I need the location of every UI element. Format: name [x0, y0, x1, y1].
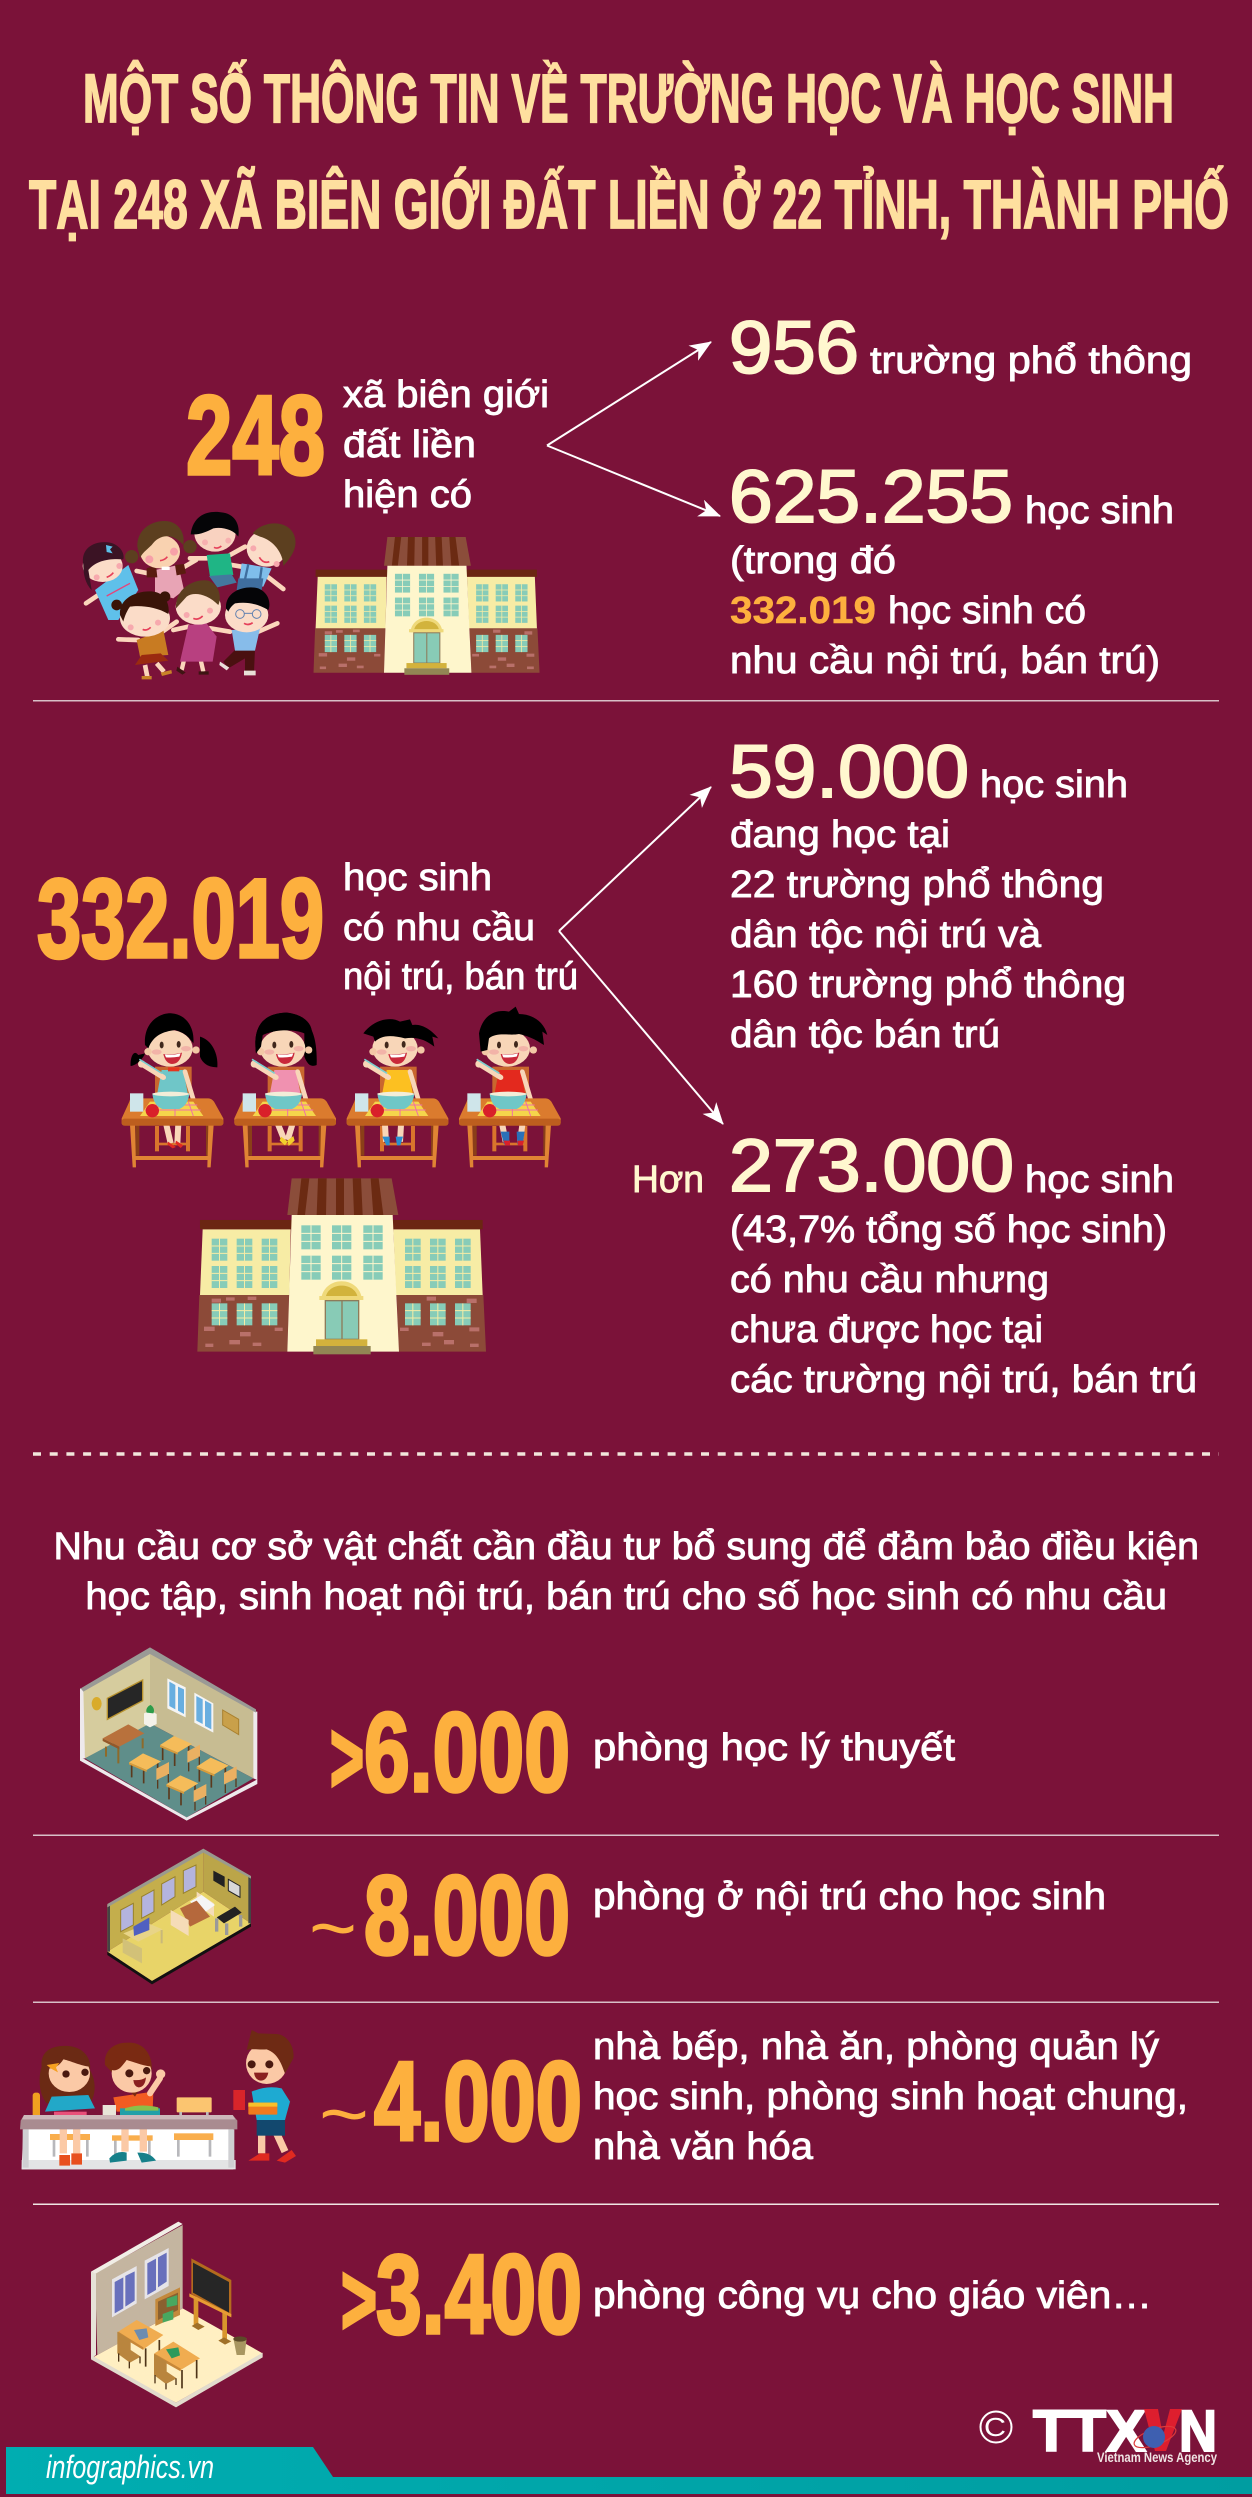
arrow: to 59.000: [559, 787, 711, 931]
stat: 625.255 students: học sinh có: [888, 590, 1086, 632]
stat: 248 border communes: xã biên giới: [343, 374, 549, 416]
stat: 59.000 students: 59.000: [729, 730, 969, 813]
logo: TTXVN copyright: C: [984, 2412, 1006, 2442]
stat: 625.255 students: nhu cầu nội trú, bán trú): [730, 640, 1160, 682]
heading: facility needs: [54, 1526, 1199, 1618]
logo: TTXVN copyright: [980, 2399, 1217, 2465]
stat: about 4.000 kitchens and dining halls: nhà văn hóa: [593, 2126, 814, 2168]
stat: more than 273.000 students: học sinh: [1025, 1159, 1174, 1201]
stat: about 4.000 kitchens and dining halls: 4.000: [374, 2039, 582, 2164]
stat: 59.000 students: 22 trường phổ thông: [730, 864, 1104, 906]
stat: 625.255 students: 625.255: [729, 455, 1013, 538]
logo: TTXVN copyright: TTX: [1033, 2399, 1146, 2464]
stat: more than 273.000 students: [632, 1124, 1197, 1401]
stat: more than 6.000 classrooms: [330, 1690, 955, 1815]
stat: more than 273.000 students: 273.000: [729, 1124, 1014, 1207]
stat: more than 273.000 students: có nhu cầu nhưng: [730, 1259, 1049, 1301]
stat: more than 273.000 students: các trường nội trú, bán trú: [730, 1359, 1197, 1401]
stat: about 8.000 boarding rooms: 8.000: [364, 1853, 570, 1978]
icon: boarding school building: [197, 1178, 486, 1354]
icon: group of children: [83, 512, 296, 679]
stat: about 8.000 boarding rooms: [309, 1853, 1106, 1978]
stat: 59.000 students: dân tộc nội trú và: [730, 914, 1042, 956]
stat: 59.000 students: [729, 730, 1128, 1056]
stat: 248 border communes: [186, 373, 549, 516]
stat: more than 6.000 classrooms: >: [330, 1702, 364, 1814]
heading: facility needs: Nhu cầu cơ sở vật chất cần đầu tư bổ sung để đảm bảo điều kiện: [54, 1526, 1199, 1568]
icon: classroom: [80, 1647, 257, 1821]
stat: 332.019 students needing boarding: học sinh: [343, 857, 492, 899]
icon: school building: [314, 537, 540, 675]
icon: teacher room: [91, 2222, 263, 2407]
logo: TTXVN copyright: Vietnam News Agency: [1097, 2449, 1217, 2465]
stat: 625.255 students: học sinh: [1025, 490, 1174, 532]
arrow: to 956: [547, 342, 711, 446]
stat: 956 schools: [729, 306, 1192, 389]
stat: 59.000 students: học sinh: [980, 764, 1128, 806]
stat: 332.019 students needing boarding: nội trú, bán trú: [343, 956, 578, 998]
stat: 59.000 students: dân tộc bán trú: [730, 1014, 1000, 1056]
stat: 59.000 students: đang học tại: [730, 814, 950, 856]
stat: 332.019 students needing boarding: 332.019: [37, 856, 324, 981]
stat: 332.019 students needing boarding: [37, 856, 578, 998]
stat: more than 3.400 teacher rooms: >: [341, 2244, 377, 2356]
stat: 248 border communes: đất liền: [343, 424, 476, 466]
icon: boarding room: [107, 1849, 251, 1984]
stat: about 4.000 kitchens and dining halls: nhà bếp, nhà ăn, phòng quản lý: [593, 2026, 1159, 2068]
stat: 248 border communes: 248: [186, 373, 325, 498]
icon: children at canteen table: [20, 2030, 296, 2169]
title: [29, 60, 1229, 243]
stat: about 8.000 boarding rooms: phòng ở nội trú cho học sinh: [593, 1876, 1106, 1918]
stat: more than 3.400 teacher rooms: phòng công vụ cho giáo viên…: [593, 2275, 1152, 2317]
heading: facility needs: học tập, sinh hoạt nội trú, bán trú cho số học sinh có nhu cầu: [85, 1576, 1167, 1618]
footer band: [6, 2447, 1252, 2494]
stat: more than 273.000 students: chưa được học tại: [730, 1309, 1043, 1351]
stat: 625.255 students: 332.019: [730, 590, 876, 632]
stat: about 8.000 boarding rooms: ~: [309, 1883, 357, 1972]
arrow: to 625.255: [547, 446, 720, 516]
stat: 248 border communes: hiện có: [343, 474, 472, 516]
website label: infographics.vn: [46, 2449, 214, 2485]
stat: 59.000 students: 160 trường phổ thông: [730, 964, 1126, 1006]
stat: more than 273.000 students: Hơn: [632, 1159, 704, 1201]
stat: more than 3.400 teacher rooms: 3.400: [376, 2232, 582, 2357]
stat: 625.255 students: (trong đó: [730, 540, 896, 582]
arrow: to 273.000: [559, 931, 723, 1124]
stat: about 4.000 kitchens and dining halls: [319, 2026, 1188, 2168]
stat: about 4.000 kitchens and dining halls: ~: [319, 2069, 369, 2158]
stat: 625.255 students: [729, 455, 1174, 682]
stat: more than 6.000 classrooms: phòng học lý thuyết: [593, 1727, 955, 1769]
stat: more than 6.000 classrooms: 6.000: [364, 1690, 570, 1815]
stat: 332.019 students needing boarding: có nhu cầu: [343, 907, 535, 949]
logo: TTXVN copyright: N: [1179, 2399, 1217, 2464]
stat: more than 3.400 teacher rooms: [341, 2232, 1152, 2357]
stat: more than 273.000 students: (43,7% tổng số học sinh): [730, 1209, 1167, 1251]
icon: children eating at desks: [122, 1007, 561, 1354]
stat: about 4.000 kitchens and dining halls: học sinh, phòng sinh hoạt chung,: [593, 2076, 1188, 2118]
stat: 956 schools: 956: [729, 306, 859, 389]
stat: 956 schools: trường phổ thông: [870, 340, 1192, 382]
